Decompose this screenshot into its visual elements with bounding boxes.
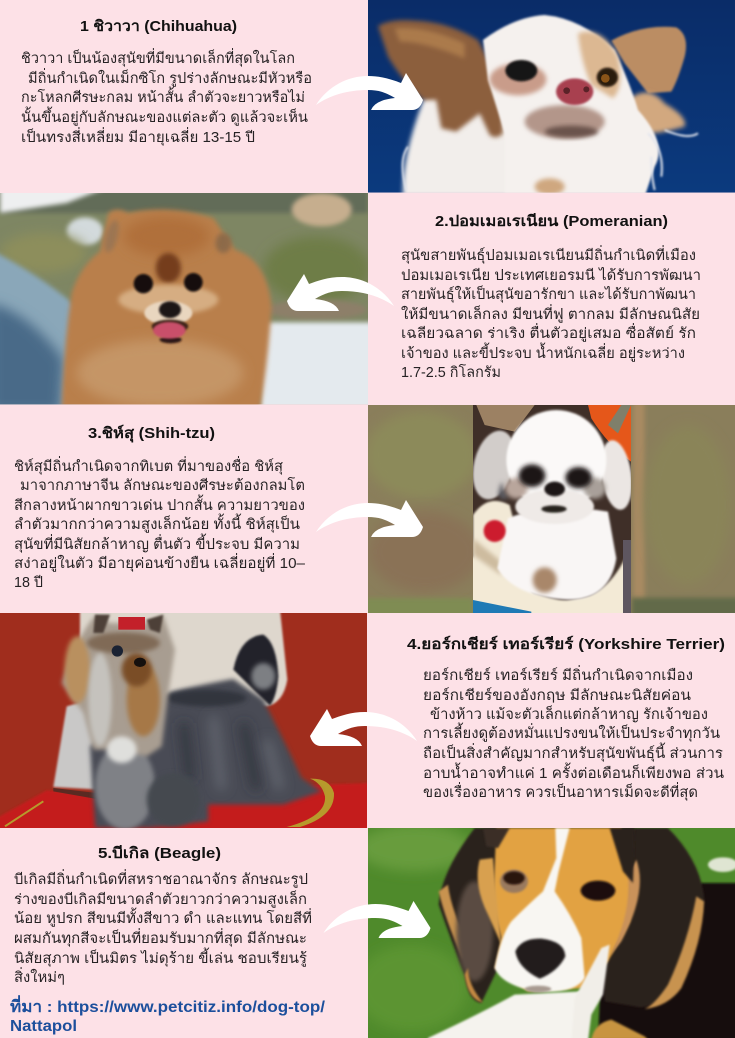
- arrow: chihuahua: [316, 73, 423, 110]
- text block: pomeranian description: สายพันธุ์ให้เป็นสุนัขอารักขา และได้รับกาพัฒนา: [401, 284, 696, 303]
- text block: shih-tzu description: สง่าอยู่ในตัว มีอายุค่อนข้างยืน เฉลี่ยอยู่ที่ 10–: [14, 553, 306, 572]
- text block: pomeranian description: เจ้าของ และขี้ประจบ น้ำหนักเฉลี่ย อยู่ระหว่าง: [401, 342, 685, 362]
- text block: pomeranian description: 1.7-2.5 กิโลกรัม: [401, 363, 501, 381]
- text block: yorkshire terrier description: การเลี้ยงดูต้องหมั่นแปรงขนให้เป็นประจำทุกวัน: [423, 722, 720, 742]
- text block: chihuahua description: กะโหลกศีรษะกลม หน้าสั้น ลำตัวจะยาวหรือไม่: [21, 86, 305, 106]
- text block: beagle description: [14, 869, 312, 986]
- arrow: beagle: [324, 901, 430, 938]
- arrow: yorkshire terrier: [310, 709, 417, 746]
- arrow: pomeranian: [287, 274, 394, 311]
- text block: chihuahua description: [21, 48, 312, 146]
- text block: beagle description: ร่างของบีเกิลมีขนาดลำตัวยาวกว่าความสูงเล็ก: [14, 889, 307, 908]
- panel: pomeranian text: [401, 213, 701, 381]
- text block: shih-tzu description: มาจากภาษาจีน ลักษณะของศีรษะต้องกลมโต: [20, 476, 305, 494]
- heading: beagle: 5.บีเกิล (Beagle): [98, 844, 221, 862]
- text block: shih-tzu description: สุนัขที่มีนิสัยกล้าหาญ ตื่นตัว ขี้ประจบ มีความ: [14, 533, 300, 553]
- heading: chihuahua: 1 ชิวาวา (Chihuahua): [80, 17, 237, 35]
- text block: yorkshire terrier description: อาบน้ำอาจทำแค่ 1 ครั้งต่อเดือนก็เพียงพอ ส่วน: [423, 762, 724, 782]
- photo: pomeranian: [0, 186, 373, 413]
- panel: chihuahua text: [21, 17, 312, 146]
- text block: yorkshire terrier description: ของเรื่องอาหาร ควรเป็นอาหารเม็ดจะดีที่สุด: [423, 782, 698, 801]
- text block: pomeranian description: สุนัขสายพันธุ์ปอมเมอเรเนียนมีถิ่นกำเนิดที่เมือง: [401, 245, 696, 264]
- text block: shih-tzu description: [14, 456, 306, 591]
- panel: beagle text: [14, 844, 312, 986]
- text block: yorkshire terrier description: [423, 665, 724, 801]
- heading: pomeranian: 2.ปอมเมอเรเนียน (Pomeranian): [435, 213, 668, 230]
- text block: beagle description: น้อย หูปรก สีขนมีทั้งสีขาว ดำ และแทน โดยสีที่: [14, 907, 312, 927]
- text block: yorkshire terrier description: ถือเป็นสิ่งสำคัญมากสำหรับสุนัขพันธุ์นี้ ส่วนการ: [423, 742, 723, 762]
- panel: shih-tzu text: [14, 424, 306, 591]
- text block: shih-tzu description: 18 ปี: [14, 574, 43, 591]
- text block: chihuahua description: นั้นขึ้นอยู่กับลักษณะของแต่ละตัว ดูแล้วจะเห็น: [21, 106, 308, 126]
- text block: shih-tzu description: สีกลางหน้าผากขาวเด่น ปากสั้น ความยาวของ: [14, 494, 305, 514]
- photo: yorkshire terrier: [0, 610, 370, 833]
- source credit: [10, 995, 326, 1035]
- source credit: ที่มา : https://www.petcitiz.info/dog-top/: [10, 995, 326, 1016]
- photo: shih-tzu: [361, 402, 735, 618]
- photo: beagle: [355, 825, 735, 1038]
- text block: pomeranian description: ให้มีขนาดเล็กลง มีขนที่ฟู ตากลม มีลักษณนิสัย: [401, 304, 700, 323]
- text block: chihuahua description: ชิวาวา เป็นน้องสุนัขที่มีขนาดเล็กที่สุดในโลก: [21, 48, 295, 67]
- text block: shih-tzu description: ชิห์สุมีถิ่นกำเนิดจากทิเบต ที่มาของชื่อ ชิห์สุ: [14, 456, 283, 475]
- text block: shih-tzu description: ลำตัวมากกว่าความสูงเล็กน้อย ทั้งนี้ ชิห์สุเป็น: [14, 513, 300, 533]
- text block: pomeranian description: [401, 245, 701, 381]
- text block: beagle description: สิ่งใหม่ๆ: [14, 967, 65, 986]
- text block: beagle description: ผสมกันทุกสีจะเป็นที่ยอมรับมากที่สุด มีลักษณะ: [14, 928, 307, 947]
- heading: shih-tzu: 3.ชิห์สุ (Shih-tzu): [88, 424, 215, 443]
- text block: yorkshire terrier description: ข้างห้าว แม้จะตัวเล็กแต่กล้าหาญ รักเจ้าของ: [430, 704, 708, 723]
- source credit: Nattapol: [10, 1018, 77, 1035]
- inset photo: [466, 405, 636, 618]
- text block: pomeranian description: ปอมเมอเรเนีย ประเทศเยอรมนี ได้รับการพัฒนา: [401, 266, 701, 284]
- arrow: shih-tzu: [316, 500, 423, 537]
- text block: yorkshire terrier description: ยอร์กเชียร์ของอังกฤษ มีลักษณะนิสัยค่อน: [423, 687, 691, 704]
- text block: beagle description: นิสัยสุภาพ เป็นมิตร ไม่ดุร้าย ขี้เล่น ชอบเรียนรู้: [14, 947, 307, 967]
- text block: chihuahua description: มีถิ่นกำเนิดในเม็กซิโก รูปร่างลักษณะมีหัวหรือ: [28, 68, 312, 87]
- text block: pomeranian description: เฉลียวฉลาด ร่าเริง ตื่นตัวอยู่เสมอ ซื่อสัตย์ รัก: [401, 323, 696, 342]
- text block: beagle description: บีเกิลมีถิ่นกำเนิดที่สหราชอาณาจักร ลักษณะรูป: [14, 869, 308, 888]
- photo: chihuahua: [368, 0, 735, 197]
- text block: yorkshire terrier description: ยอร์กเชียร์ เทอร์เรียร์ มีถิ่นกำเนิดจากเมือง: [423, 665, 693, 684]
- heading: yorkshire terrier: 4.ยอร์กเชียร์ เทอร์เรียร์ (Yorkshire Terrier): [407, 635, 725, 653]
- text block: chihuahua description: เป็นทรงสี่เหลี่ยม มีอายุเฉลี่ย 13-15 ปี: [21, 127, 255, 146]
- panel: yorkshire terrier text: [407, 635, 725, 801]
